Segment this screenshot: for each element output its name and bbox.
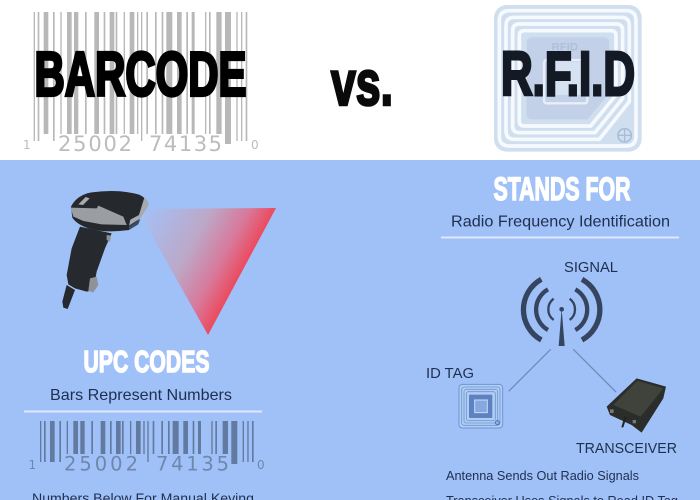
barcode digits: 1 — [23, 138, 31, 152]
UPC digits: 25002 — [64, 452, 138, 476]
connector: antenna to transceiver — [573, 349, 616, 392]
UPC digits — [28, 452, 265, 476]
text: antenna sends out radio signals: Antenna Sends Out Radio Signals — [446, 469, 639, 483]
title: vs.: vs. — [331, 49, 393, 119]
divider left — [24, 410, 262, 412]
UPC digits: 1 — [28, 458, 36, 472]
UPC digits: 74135 — [156, 452, 229, 476]
title: R.F.I.D: R.F.I.D — [501, 40, 635, 109]
heading: UPC CODES: UPC CODES — [84, 344, 210, 379]
text: radio frequency identification: Radio Frequency Identification — [451, 214, 670, 230]
panel: white header — [0, 0, 700, 160]
barcode digits: 25002 — [58, 132, 132, 156]
barcode digits: 74135 — [149, 132, 222, 156]
icon: transceiver box — [607, 378, 666, 433]
icon: RFID tag backdrop: RFID — [552, 42, 578, 54]
icon: RFID tag backdrop — [494, 5, 642, 152]
heading: STANDS FOR: STANDS FOR — [494, 171, 630, 207]
icon: UPC barcode — [28, 421, 265, 476]
icon: barcode backdrop — [34, 12, 247, 144]
text: bars represent numbers: Bars Represent Numbers — [50, 387, 232, 404]
label: TRANSCEIVER: TRANSCEIVER — [576, 440, 677, 457]
icon: signal antenna — [523, 279, 600, 346]
label: ID TAG: ID TAG — [426, 365, 474, 382]
barcode digits: 0 — [251, 138, 259, 152]
divider right — [441, 236, 679, 238]
title: BARCODE: BARCODE — [34, 40, 246, 110]
icon: barcode scanner — [62, 191, 148, 309]
connector: antenna to ID tag — [509, 349, 551, 391]
label: SIGNAL: SIGNAL — [564, 259, 618, 276]
panel: blue comparison body — [0, 160, 700, 500]
UPC digits: 0 — [257, 458, 265, 472]
icon: ID tag — [459, 384, 503, 428]
chart: red laser beam — [137, 208, 276, 335]
barcode digits — [23, 132, 259, 156]
